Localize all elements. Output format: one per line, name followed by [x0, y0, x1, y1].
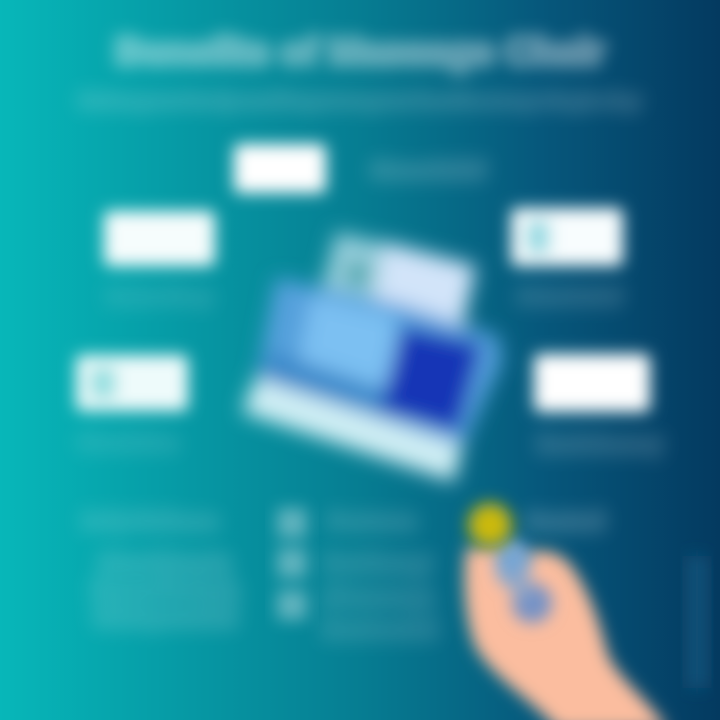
upper panel left part: [316, 232, 405, 318]
text block: bottom middle list: Heat therapy: [326, 553, 431, 575]
body highlight: [298, 296, 398, 394]
illustration: hand holding remote: [464, 503, 668, 720]
text block: vertical side note: [688, 556, 706, 688]
text block: bottom middle list: [324, 553, 436, 641]
text block: upper right caption: Pain Relief: [520, 287, 621, 307]
dark blue panel: [380, 326, 482, 432]
body lower shade: [262, 350, 392, 416]
text block: bottom right label: Control: [527, 511, 603, 533]
icons: bottom middle list markers: [277, 508, 307, 620]
panel: lower left box: [76, 355, 188, 411]
panel: top label box: [234, 144, 326, 193]
illustration: central device: [242, 232, 502, 482]
text block: bottom left list: Eases your back pain: [92, 580, 238, 602]
text block: bottom left list: [92, 553, 238, 629]
remote: [495, 538, 552, 623]
dark spot: [347, 263, 369, 285]
text block: bottom left heading: Daily Wellness: [83, 511, 217, 533]
text block: bottom left list: Calms your mind: [95, 607, 235, 629]
hand: [464, 548, 668, 720]
text block: lower right caption: Muscle Recovery: [538, 434, 663, 456]
base slab: [242, 378, 462, 482]
panel: upper right box: [511, 208, 623, 266]
text block: bottom left list: Relaxes tight muscles: [100, 553, 230, 575]
panel: upper left box: [104, 211, 215, 266]
text block: top caption: Stress Relief: [372, 160, 484, 182]
upper panel right part: [372, 242, 476, 328]
text block: lower left caption: Circulation: [79, 433, 177, 453]
device body: [256, 278, 502, 448]
yellow dot: [468, 503, 512, 547]
title: Benefits of Massage Chair: [115, 31, 605, 73]
subtitle: Relax your body and improve your health every single day: [80, 91, 640, 111]
text block: bottom middle list: Remote control: [324, 619, 436, 641]
text block: upper left caption: Better Sleep: [108, 287, 212, 307]
text block: bottom middle list: Air massage: [324, 587, 432, 609]
text block: bottom middle heading: Features: [329, 511, 415, 533]
panel: lower right box: [534, 354, 650, 412]
